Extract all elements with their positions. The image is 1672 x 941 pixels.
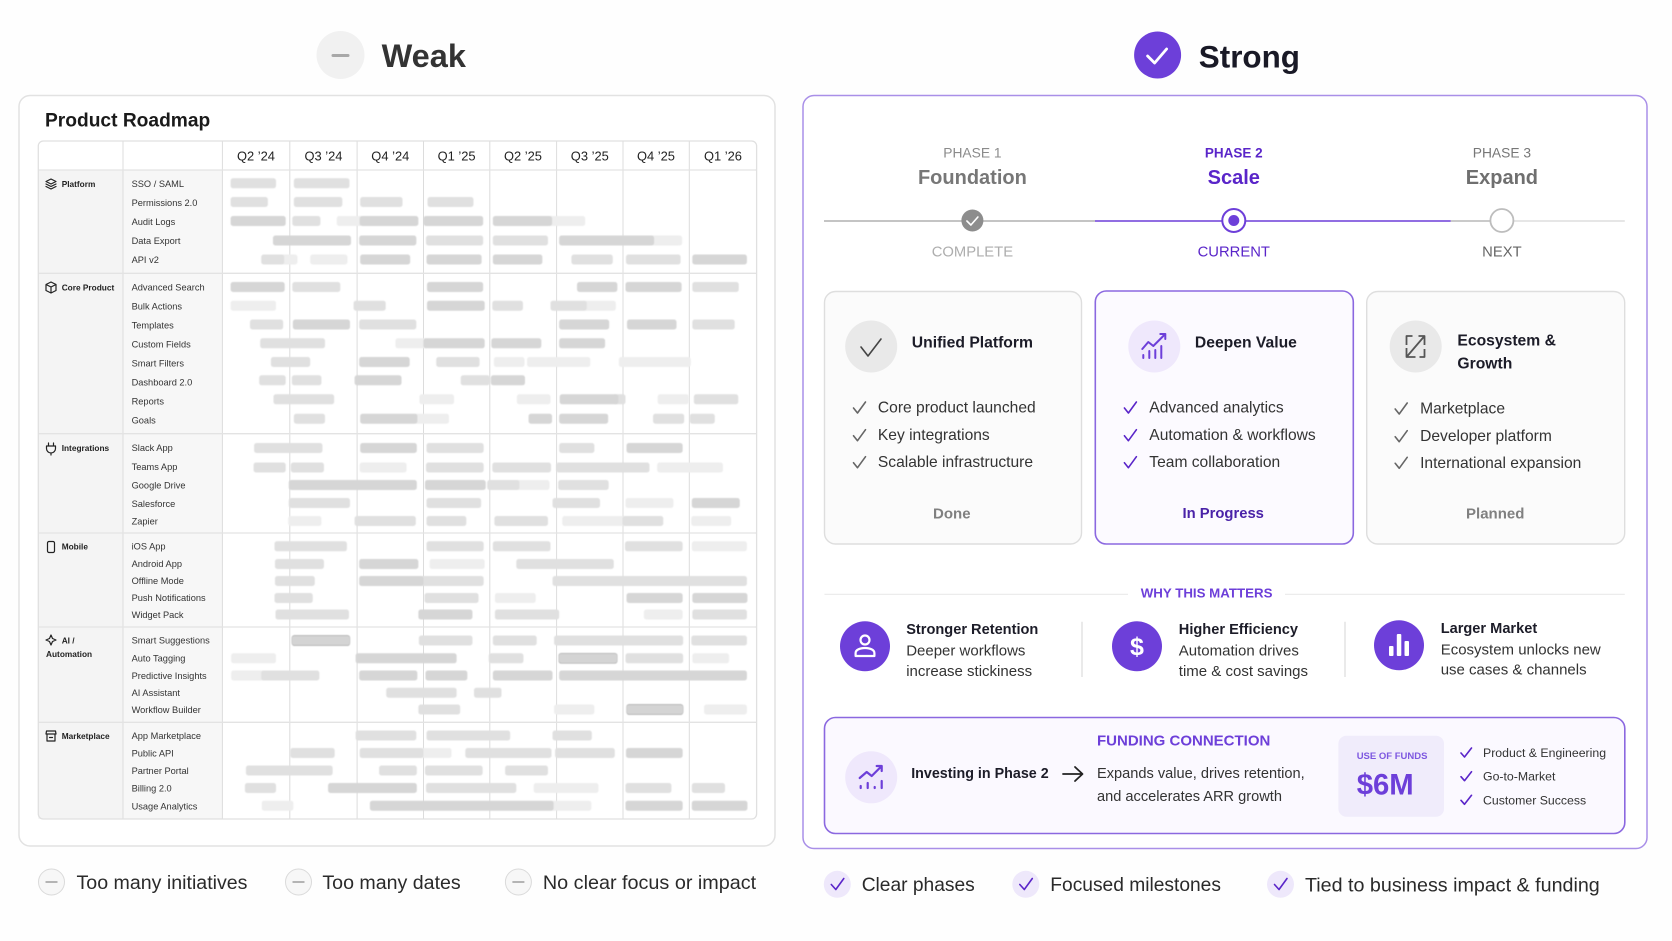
labels: Core Product rows: Templates (132, 321, 174, 331)
labels: Marketplace rows: Usage Analytics (132, 801, 198, 811)
benefit: Stronger Retention: Stronger Retention (906, 622, 1038, 638)
heading: Weak: Weak (382, 38, 467, 74)
panel: weak product roadmap (19, 96, 775, 846)
strong takeaways: Clear phases (862, 875, 975, 896)
quarter headers: Q3 ’24 (305, 148, 342, 164)
card: Unified Platform: Core product launched (878, 400, 1036, 416)
use of funds list: Product & Engineering (1483, 746, 1606, 760)
use of funds tile: $6M (1357, 768, 1414, 802)
benefit: Larger Market: Larger Market (1441, 621, 1537, 637)
funding connection callout: and accelerates ARR growth (1097, 789, 1282, 805)
funding connection callout: Expands value, drives retention, (1097, 766, 1305, 782)
labels: Mobile rows: Offline Mode (132, 576, 184, 586)
bars: AI / Automation (231, 636, 747, 714)
funding connection callout (824, 718, 1625, 834)
category: Mobile (48, 542, 88, 552)
benefit: Larger Market: Ecosystem unlocks new (1441, 642, 1601, 658)
labels: Platform rows: SSO / SAML (132, 179, 184, 189)
labels: Platform rows: Permissions 2.0 (132, 198, 197, 208)
category: AI / Automation: Automation (46, 649, 92, 659)
node: next (1490, 209, 1513, 232)
benefit: Stronger Retention: increase stickiness (906, 663, 1032, 680)
benefit: Higher Efficiency: time & cost savings (1179, 663, 1308, 680)
heading: Weak (316, 31, 467, 79)
phase headers: PHASE 2 (1205, 146, 1263, 160)
bars: Core Product (231, 282, 739, 424)
labels: Integrations rows: Zapier (132, 516, 158, 526)
category: AI / Automation (46, 635, 92, 659)
labels: Integrations rows: Google Drive (132, 481, 186, 491)
card: Unified Platform: Key integrations (878, 427, 990, 444)
benefit: Higher Efficiency: $ (1130, 633, 1144, 661)
phase status labels: NEXT (1482, 244, 1522, 260)
category: Core Product (46, 282, 114, 293)
labels: Mobile rows: Push Notifications (132, 593, 206, 603)
card: Ecosystem and Growth: Growth (1457, 356, 1512, 372)
use of funds list: Go-to-Market (1483, 770, 1556, 784)
labels: Platform rows: Data Export (132, 236, 181, 246)
heading: Strong: Strong (1199, 40, 1300, 74)
node: complete (961, 210, 983, 232)
quarter headers: Q4 ’25 (637, 148, 675, 164)
use of funds list (1461, 746, 1606, 807)
icon: growth chart (845, 751, 897, 803)
labels: Marketplace rows: Public API (132, 748, 174, 758)
benefit: Larger Market (1374, 620, 1601, 678)
phase headers (918, 146, 1538, 189)
bars: Platform (231, 178, 747, 264)
labels: Integrations rows: Salesforce (132, 499, 175, 509)
use of funds tile (1338, 736, 1444, 817)
labels: Core Product rows: Goals (132, 415, 156, 425)
weak takeaways (38, 869, 757, 895)
node: current (1222, 209, 1245, 232)
labels: Mobile rows (132, 542, 206, 620)
weak takeaways: No clear focus or impact (543, 872, 757, 894)
card: Unified Platform: Scalable infrastructure (878, 454, 1033, 471)
heading: Strong (1134, 32, 1300, 78)
card: Ecosystem and Growth: Planned (1466, 506, 1524, 522)
card: Deepen Value: Automation & workflows (1149, 427, 1316, 444)
quarter headers: Q1 ’25 (438, 148, 476, 164)
card: Ecosystem and Growth: Developer platform (1420, 428, 1552, 445)
phase status labels (932, 244, 1522, 260)
category: Platform: Platform (62, 179, 95, 189)
bars: Marketplace (245, 730, 747, 811)
benefit: Stronger Retention: Deeper workflows (906, 642, 1025, 660)
quarter headers: Q1 ’26 (704, 148, 742, 164)
section heading: why this matters: WHY THIS MATTERS (1141, 586, 1273, 600)
card: Ecosystem and Growth: Ecosystem & (1457, 332, 1556, 350)
phase headers: PHASE 1 (943, 146, 1002, 160)
card: Ecosystem and Growth: Marketplace (1420, 400, 1505, 418)
card: Unified Platform (824, 292, 1082, 544)
bars: Mobile (274, 541, 747, 620)
card: Unified Platform: Done (933, 506, 971, 522)
labels: Platform rows: Audit Logs (132, 217, 176, 227)
labels: Core Product rows: Bulk Actions (132, 302, 182, 312)
arrow (1063, 767, 1082, 781)
panel: strong phased roadmap (803, 96, 1647, 848)
quarter headers: Q4 ’24 (371, 148, 409, 164)
labels: Marketplace rows: Partner Portal (132, 766, 189, 776)
labels: Integrations rows: Teams App (132, 462, 177, 472)
card: Ecosystem and Growth: International expansion (1420, 455, 1581, 472)
labels: Mobile rows: iOS App (132, 542, 166, 552)
benefit: Stronger Retention (840, 621, 1038, 680)
bars: Integrations (254, 443, 740, 526)
funding connection callout: Investing in Phase 2 (911, 766, 1049, 782)
labels: Marketplace rows (132, 731, 201, 811)
phase headers: Expand (1466, 167, 1538, 189)
labels: AI / Automation rows (132, 636, 210, 715)
weak takeaways: Too many dates (322, 872, 461, 894)
labels: Core Product rows: Custom Fields (132, 340, 191, 350)
phase status labels: COMPLETE (932, 244, 1013, 260)
category: Platform (46, 179, 95, 189)
labels: Core Product rows: Advanced Search (132, 282, 205, 292)
strong takeaways: Focused milestones (1050, 875, 1221, 896)
card: Deepen Value: Advanced analytics (1149, 400, 1284, 416)
phase status labels: CURRENT (1198, 244, 1270, 260)
timeline (824, 209, 1625, 232)
quarter headers: Q3 ’25 (571, 148, 609, 164)
phase headers: PHASE 3 (1473, 146, 1531, 160)
quarter headers: Q2 ’24 (237, 148, 275, 164)
roadmap table grid (38, 141, 757, 819)
labels: Marketplace rows: Billing 2.0 (132, 784, 172, 794)
strong takeaways (824, 871, 1600, 898)
category: AI / Automation: AI / (62, 636, 75, 646)
benefit: Larger Market: use cases & channels (1441, 662, 1587, 678)
card: Deepen Value (1095, 291, 1353, 544)
card: Ecosystem and Growth (1367, 292, 1625, 544)
roadmap title: Product Roadmap (45, 110, 210, 132)
labels: Mobile rows: Android App (132, 559, 182, 569)
labels: AI / Automation rows: Workflow Builder (132, 705, 201, 715)
phase headers: Foundation (918, 167, 1027, 189)
use of funds tile: USE OF FUNDS (1357, 751, 1427, 762)
card: Deepen Value: Deepen Value (1195, 334, 1297, 352)
card: Deepen Value: In Progress (1182, 506, 1264, 522)
labels: Platform rows: API v2 (132, 255, 159, 265)
category: Integrations: Integrations (62, 443, 110, 453)
category: Mobile: Mobile (62, 542, 88, 552)
category: Core Product: Core Product (62, 282, 114, 292)
labels: Mobile rows: Widget Pack (132, 610, 184, 620)
card: Deepen Value: Team collaboration (1149, 454, 1280, 471)
benefit: Higher Efficiency: Higher Efficiency (1179, 622, 1299, 638)
funding connection callout: FUNDING CONNECTION (1097, 732, 1270, 750)
quarter headers (237, 148, 742, 164)
quarter headers: Q2 ’25 (504, 148, 542, 164)
labels: Core Product rows: Reports (132, 396, 164, 406)
benefit: Higher Efficiency: Automation drives (1179, 642, 1299, 660)
card: Unified Platform: Unified Platform (912, 334, 1033, 352)
labels: Core Product rows: Dashboard 2.0 (132, 377, 192, 387)
labels: Marketplace rows: App Marketplace (132, 731, 201, 741)
labels: AI / Automation rows: Predictive Insights (132, 671, 207, 681)
benefit: Higher Efficiency (1112, 621, 1308, 680)
labels: Core Product rows: Smart Filters (132, 359, 184, 369)
labels: Core Product rows (132, 282, 205, 425)
labels: AI / Automation rows: Auto Tagging (132, 654, 185, 664)
labels: AI / Automation rows: AI Assistant (132, 688, 180, 698)
labels: Integrations rows (132, 443, 186, 526)
category: Marketplace: Marketplace (62, 731, 110, 741)
labels: Integrations rows: Slack App (132, 443, 173, 453)
phase headers: Scale (1208, 167, 1260, 189)
labels: AI / Automation rows: Smart Suggestions (132, 636, 210, 646)
category: Integrations (46, 443, 110, 455)
use of funds list: Customer Success (1483, 793, 1586, 807)
strong takeaways: Tied to business impact & funding (1305, 874, 1600, 896)
labels: Platform rows (132, 179, 197, 265)
weak takeaways: Too many initiatives (76, 872, 248, 894)
